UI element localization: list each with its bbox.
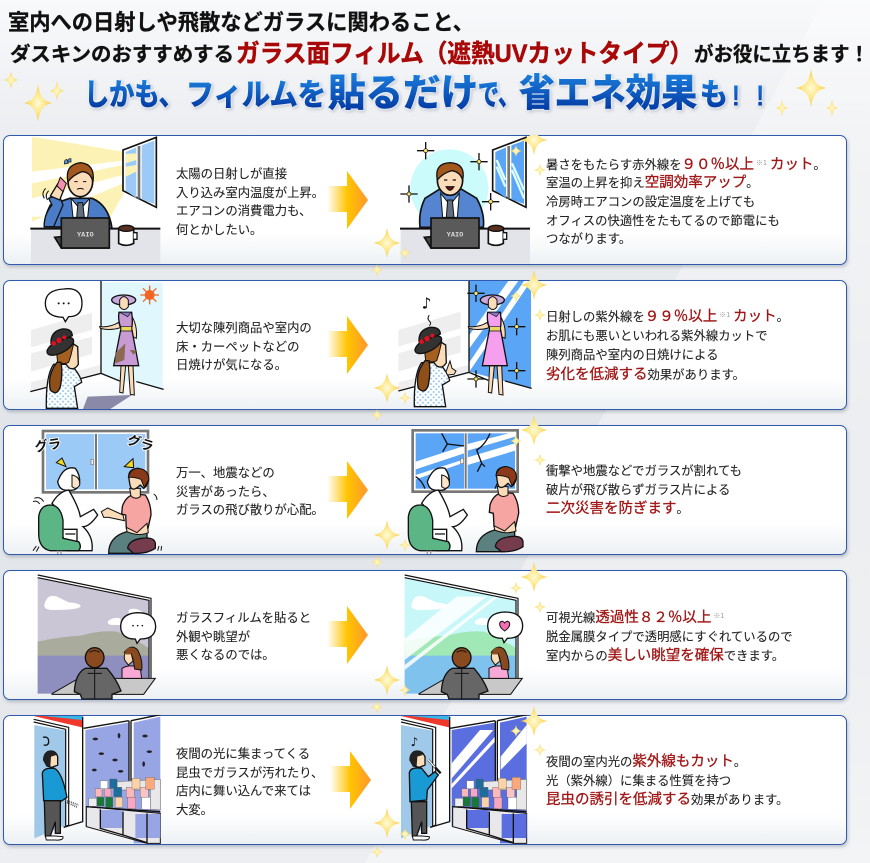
panel: sun fading: [2, 270, 850, 421]
panel: solar heat: [2, 135, 850, 276]
heading line 2: ガラス面フィルム（遮熱UVカットタイプ）: [236, 40, 693, 68]
solution text: [546, 464, 742, 517]
blue headline: [84, 73, 764, 115]
problem text: 災害があったら、: [176, 484, 275, 498]
problem text: 悪くなるのでは。: [176, 648, 275, 662]
problem text: 床・カーペットなどの: [176, 340, 299, 354]
problem text: 大変。: [176, 802, 213, 816]
problem text: ガラスフィルムを貼ると: [176, 611, 311, 625]
problem text: 夜間の光に集まってくる: [176, 747, 310, 761]
illustration: comfortable office worker: [400, 136, 530, 264]
illustration: clear view: [404, 574, 524, 700]
blue headline: も: [700, 79, 728, 112]
solution text: 日射しの紫外線を９９％以上 ※1カット。: [546, 309, 789, 325]
blue headline: !!: [732, 80, 764, 111]
solution text: 破片が飛び散らずガラス片による: [546, 482, 730, 496]
solution text: 昆虫の誘引を低減する効果があります。: [546, 792, 789, 808]
problem text: ガラスの飛び散りが心配。: [176, 503, 324, 517]
solution text: 暑さをもたらす赤外線を９０％以上 ※1カット。: [546, 157, 826, 173]
solution text: 衝撃や地震などでガラスが割れても: [546, 464, 742, 478]
solution text: つながります。: [546, 232, 631, 246]
problem text: [176, 747, 323, 816]
solution text: 脱金属膜タイプで透明感にすぐれているので: [546, 630, 793, 644]
problem text: [176, 321, 312, 372]
solution text: オフィスの快適性をたもてるので節電にも: [546, 214, 780, 228]
heading line 1: 室内への日射しや飛散などガラスに関わること、: [8, 10, 474, 35]
arrow: [328, 461, 368, 519]
illustration: shaking window: [32, 429, 162, 554]
solution text: お肌にも悪いといわれる紫外線カットで: [546, 328, 768, 342]
header sparkles: [4, 69, 838, 122]
problem text: [176, 611, 311, 662]
heading line 2: [10, 40, 869, 68]
problem text: [176, 167, 324, 236]
heading line 2: ダスキンのおすすめする: [10, 42, 234, 66]
sparkles: [371, 562, 548, 713]
solution text: 陳列商品や室内の日焼けによる: [546, 348, 718, 362]
illustration: insects reduced: ♪: [411, 735, 418, 749]
panel: view: [2, 562, 850, 713]
problem text: 何とかしたい。: [176, 222, 262, 236]
problem text: エアコンの消費電力も、: [176, 204, 311, 218]
solution text: 室内からの美しい眺望を確保できます。: [546, 648, 784, 664]
arrow: [328, 316, 368, 374]
solution text: [546, 609, 793, 664]
sparkles: [371, 415, 548, 568]
sparkles: [371, 270, 548, 421]
blue headline: で、: [478, 79, 519, 112]
blue headline: 貼るだけ: [328, 73, 478, 115]
solution text: [546, 753, 789, 808]
illustration: dull view: [38, 574, 156, 700]
blue headline: 省エネ効果: [519, 73, 697, 115]
illustration: insects reduced: [400, 715, 528, 844]
problem text: 大切な陳列商品や室内の: [176, 321, 312, 335]
solution text: [546, 156, 826, 246]
illustration: protected displays: ♪: [422, 294, 431, 312]
illustration: protected displays: [398, 281, 532, 408]
problem text: 太陽の日射しが直接: [176, 167, 287, 181]
solution text: 劣化を低減する効果があります。: [546, 366, 745, 382]
illustration: hot office worker: [30, 136, 160, 264]
solution text: 室温の上昇を抑え空調効率アップ。: [546, 174, 759, 190]
illustration: faded displays: [30, 281, 164, 409]
illustration: cracked window held together: [408, 429, 524, 554]
illustration: insects on glass: [34, 715, 161, 844]
problem text: 入り込み室内温度が上昇。: [176, 186, 324, 200]
sparkles: [371, 135, 548, 276]
header title: [4, 10, 869, 122]
problem text: 日焼けが気になる。: [176, 358, 287, 372]
arrow: [330, 751, 371, 809]
solution text: [546, 308, 789, 382]
panel: earthquake: [2, 415, 850, 568]
panel: insects: [2, 706, 850, 858]
arrow: [328, 171, 368, 229]
blue headline: フィルムを: [186, 79, 326, 112]
sparkles: [371, 706, 548, 858]
problem text: 外観や眺望が: [176, 630, 250, 644]
problem text: 万一、地震などの: [176, 466, 275, 480]
solution text: 光（紫外線）に集まる性質を持つ: [546, 774, 731, 788]
illustration: shaking window: グラ: [125, 429, 156, 455]
blue headline: しかも、: [84, 79, 184, 112]
solution text: 二次災害を防ぎます。: [546, 501, 689, 517]
heading line 2: がお役に立ちます！: [694, 42, 869, 66]
problem text: 店内に舞い込んで来ては: [176, 784, 311, 798]
illustration: shaking window: グラ: [33, 433, 62, 456]
problem text: [176, 466, 324, 517]
solution text: 夜間の室内光の紫外線もカット。: [546, 754, 746, 770]
arrow: [328, 606, 368, 664]
solution text: 可視光線透過性８２％以上 ※1: [546, 610, 724, 626]
problem text: 昆虫でガラスが汚れたり、: [176, 766, 323, 780]
solution text: 冷房時エアコンの設定温度を上げても: [546, 195, 755, 209]
